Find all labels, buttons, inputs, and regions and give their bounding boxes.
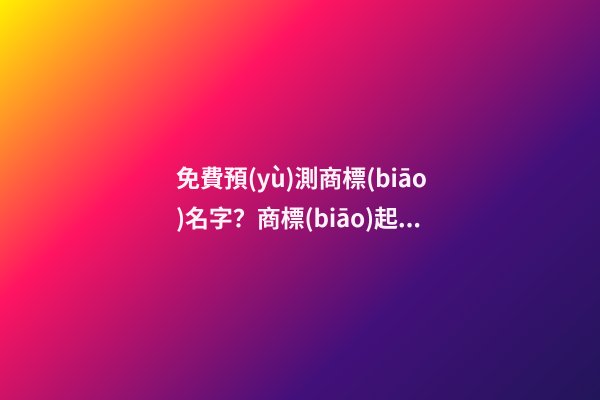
title <box>176 159 427 234</box>
title: 免費預(yù)測商標(biāo <box>176 159 427 194</box>
title: )名字？商標(biāo)起... <box>176 199 421 234</box>
